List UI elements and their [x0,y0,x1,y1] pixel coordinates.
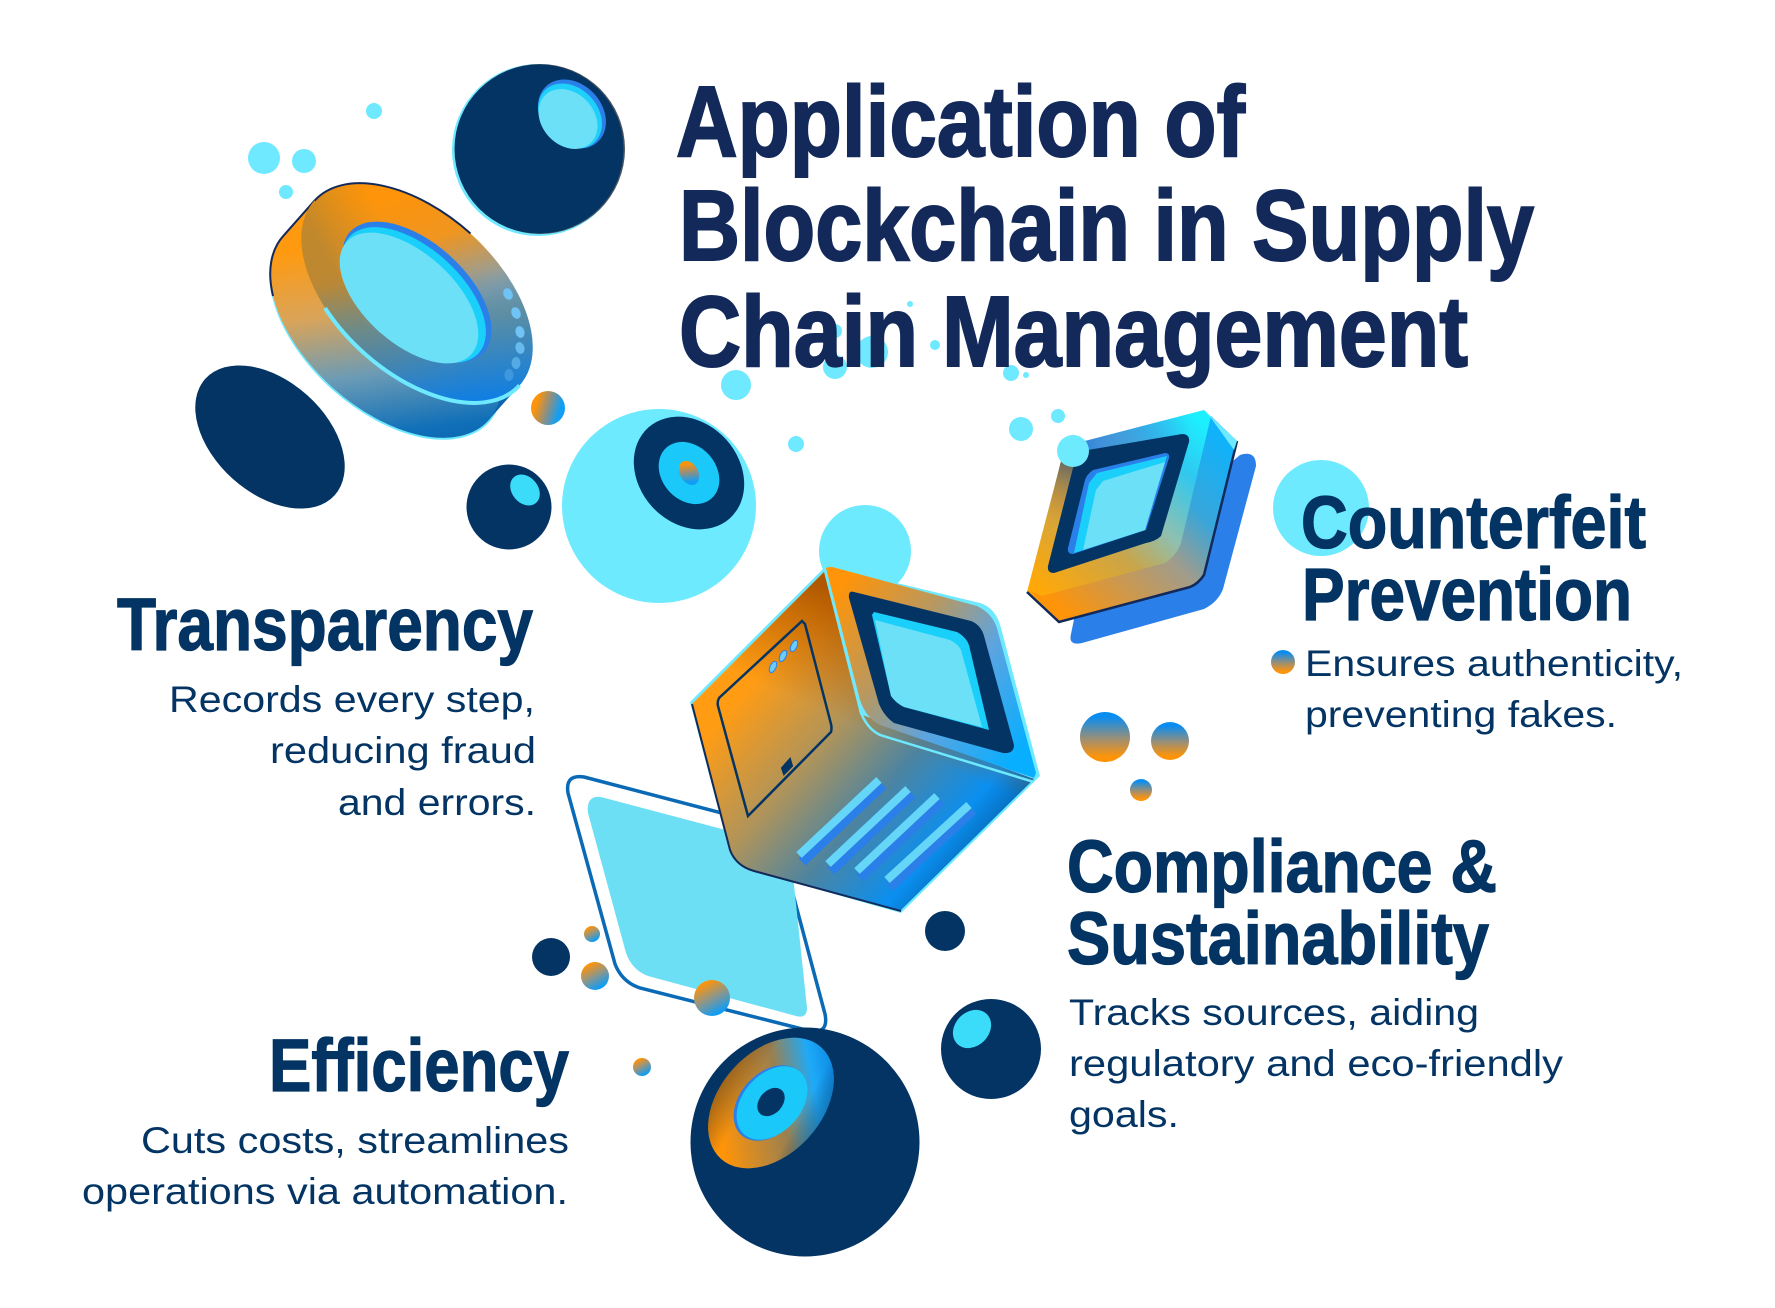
icon: orange and blue disc [229,141,573,482]
text block: Counterfeit Prevention: Ensures authenticity, [1305,643,1683,684]
text block: Compliance and Sustainability [1067,825,1564,1135]
title: Application of [676,66,1246,178]
icon: big dark sphere with eye [683,1013,920,1256]
text block: Transparency: Transparency [117,583,533,666]
text block: Compliance and Sustainability: regulatory and eco-friendly [1069,1043,1564,1084]
text block: Efficiency: operations via automation. [82,1171,568,1212]
icon: small dark sphere [466,464,552,550]
icon: small gradient ball by disc [531,391,565,425]
text block: Efficiency [82,1024,569,1212]
text block: Counterfeit Prevention: Prevention [1302,553,1632,636]
text block: Transparency: Records every step, [169,679,535,720]
text block: Counterfeit Prevention: Counterfeit [1301,481,1646,564]
text block: Counterfeit Prevention: preventing fakes. [1305,694,1617,735]
icon: gradient balls left of tablet [532,926,730,1076]
icon: floating cyan bubbles [248,103,1065,452]
text block: Transparency [117,583,536,823]
title: Chain Management [679,276,1468,388]
icon: dark dot by cube [925,911,965,951]
icon: chip with blue backing [1027,410,1256,644]
icon: bullet ball by counterfeit text [1271,650,1295,674]
icon: top dark sphere [452,64,625,236]
title [676,66,1534,388]
title: Blockchain in Supply [679,170,1534,282]
text block: Efficiency: Efficiency [269,1024,569,1107]
icon: dark shadow ellipse [168,337,372,537]
icon: trio of gradient balls [1080,712,1189,801]
icon: cyan bubble behind counterfeit heading [1273,460,1369,556]
text block: Transparency: and errors. [338,782,536,823]
text block: Compliance and Sustainability: Tracks sources, aiding [1069,992,1479,1033]
icon: cyan dot on chip [1057,435,1089,467]
text block: Compliance and Sustainability: goals. [1069,1094,1179,1135]
text block: Transparency: reducing fraud [270,730,536,771]
icon: cyan circle behind cube [819,505,911,597]
text block: Compliance and Sustainability: Compliance & [1067,825,1497,908]
icon: large cyan circle with target [562,394,767,603]
icon: dark ball with cyan highlight [941,999,1041,1099]
text block: Efficiency: Cuts costs, streamlines [141,1120,569,1161]
icon: tablet outline [568,777,826,1031]
text block: Counterfeit Prevention [1301,481,1683,735]
text block: Compliance and Sustainability: Sustainability [1067,897,1489,980]
icon: cube server [690,566,1040,913]
